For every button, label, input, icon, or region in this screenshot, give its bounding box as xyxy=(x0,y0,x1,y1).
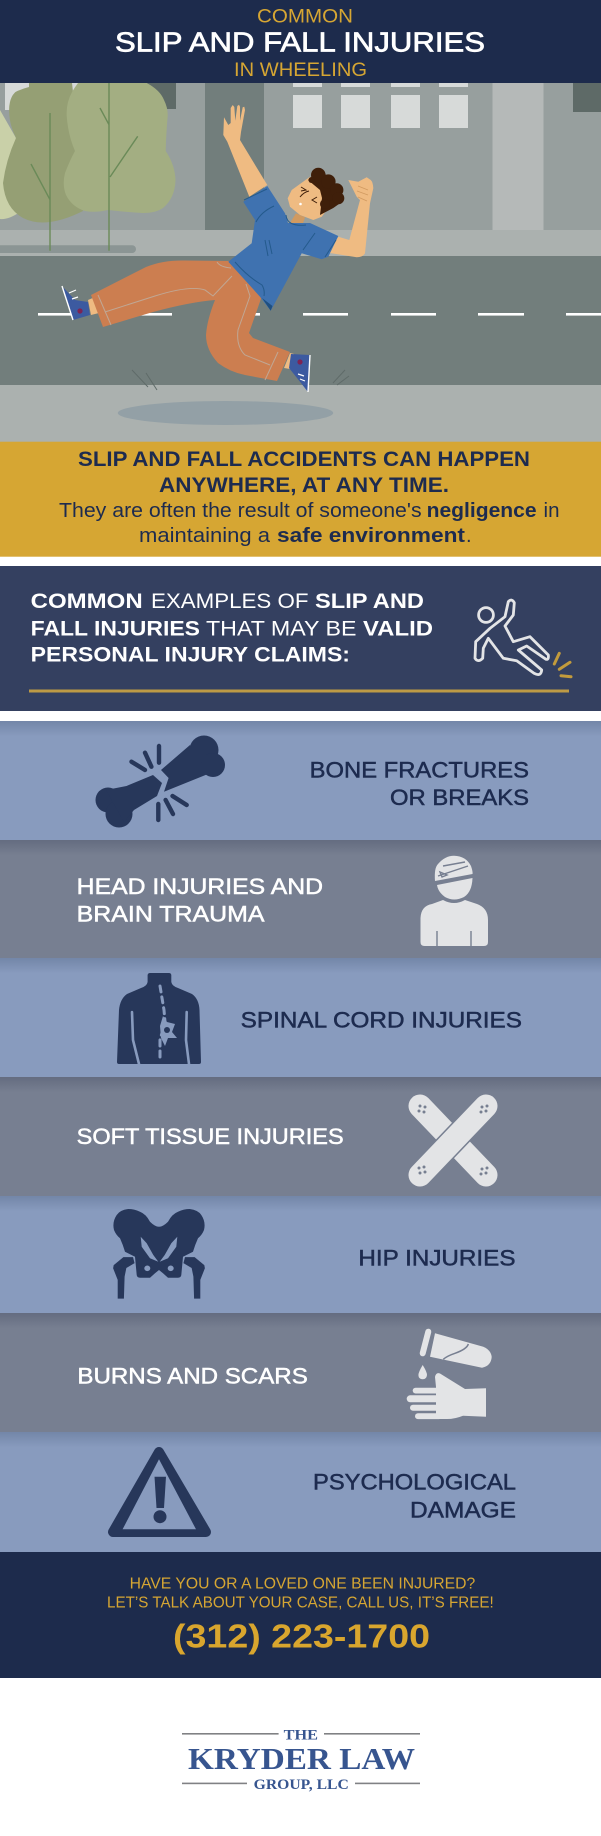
statement body: . xyxy=(466,525,472,547)
label: OR BREAKS xyxy=(390,785,529,810)
label xyxy=(313,1469,516,1523)
label: SPINAL CORD INJURIES xyxy=(241,1008,522,1033)
logo: KRYDER LAW xyxy=(188,1741,415,1776)
right arm xyxy=(328,177,373,257)
call to action text: HAVE YOU OR A LOVED ONE BEEN INJURED? xyxy=(130,1575,476,1592)
icon: warning triangle xyxy=(113,1452,206,1532)
road dashes xyxy=(38,313,601,316)
examples heading: FALL INJURIES xyxy=(31,618,200,641)
label xyxy=(310,758,529,810)
examples heading: SLIP AND xyxy=(315,590,424,613)
phone number: (312) 223-1700 xyxy=(173,1617,430,1654)
label: HEAD INJURIES AND xyxy=(77,874,323,899)
road xyxy=(0,256,601,385)
label xyxy=(77,874,323,927)
band: bone fractures xyxy=(0,721,601,840)
label: BRAIN TRAUMA xyxy=(77,902,265,927)
icon: crossed bandages xyxy=(418,1104,488,1176)
statement body: They are often the result of someone's xyxy=(59,500,422,522)
examples heading xyxy=(31,590,433,667)
band: psychological damage xyxy=(0,1432,601,1552)
buildings xyxy=(5,83,601,230)
statement body: in xyxy=(544,500,560,522)
planter xyxy=(0,245,136,253)
statement body: maintaining a xyxy=(139,525,271,547)
head xyxy=(288,177,337,220)
logo xyxy=(182,1727,420,1793)
band: soft tissue injuries xyxy=(0,1077,601,1196)
left arm xyxy=(223,105,267,197)
label: HIP INJURIES xyxy=(358,1246,516,1271)
call to action text xyxy=(107,1575,494,1611)
icon: bandaged head xyxy=(420,856,488,946)
title: SLIP AND FALL INJURIES xyxy=(115,27,485,58)
icon: broken bone xyxy=(96,736,225,828)
illustration: street scene with falling man xyxy=(0,83,601,442)
ankles xyxy=(88,297,99,315)
band: head injuries xyxy=(0,840,601,958)
pants xyxy=(91,260,290,381)
icon: spine back xyxy=(117,973,201,1064)
label: BURNS AND SCARS xyxy=(77,1363,308,1388)
label: BONE FRACTURES xyxy=(310,758,529,783)
icon: chemical on hand xyxy=(407,1332,492,1419)
call to action footer xyxy=(0,1552,601,1678)
label: PSYCHOLOGICAL xyxy=(313,1469,516,1494)
examples heading: PERSONAL INJURY CLAIMS: xyxy=(31,644,350,667)
statement body: negligence xyxy=(427,500,537,522)
shadow xyxy=(118,401,333,425)
label: DAMAGE xyxy=(410,1498,516,1523)
shoes xyxy=(62,286,90,320)
falling man xyxy=(62,105,373,392)
header xyxy=(0,0,601,83)
logo: GROUP, LLC xyxy=(254,1777,349,1793)
label: SOFT TISSUE INJURIES xyxy=(77,1124,344,1149)
sidewalk back xyxy=(0,230,601,256)
statement body: safe environment xyxy=(277,525,465,547)
icon: falling person xyxy=(475,600,571,677)
header location: IN WHEELING xyxy=(234,60,367,81)
trees xyxy=(0,83,176,251)
band: burns and scars xyxy=(0,1313,601,1432)
examples heading: EXAMPLES OF xyxy=(151,590,308,613)
sidewalk front xyxy=(0,385,601,442)
examples heading: VALID xyxy=(363,618,433,641)
divider line xyxy=(29,690,569,692)
examples heading: THAT MAY BE xyxy=(206,618,356,641)
motion lines xyxy=(132,370,349,390)
neck xyxy=(289,213,305,224)
examples heading: COMMON xyxy=(31,590,143,613)
band: spinal cord injuries xyxy=(0,958,601,1077)
logo: THE xyxy=(284,1727,318,1743)
band: hip injuries xyxy=(0,1196,601,1313)
statement heading: ANYWHERE, AT ANY TIME. xyxy=(159,474,449,497)
statement heading: SLIP AND FALL ACCIDENTS CAN HAPPEN xyxy=(78,448,530,471)
header kicker: COMMON xyxy=(257,7,353,28)
statement body xyxy=(59,500,560,547)
call to action text: LET’S TALK ABOUT YOUR CASE, CALL US, IT’S FREE! xyxy=(107,1594,494,1611)
gold statement panel xyxy=(0,442,601,557)
shirt xyxy=(228,186,338,311)
examples panel xyxy=(0,566,601,711)
statement heading xyxy=(78,448,530,497)
icon: pelvis xyxy=(113,1209,205,1299)
hair xyxy=(308,168,344,215)
